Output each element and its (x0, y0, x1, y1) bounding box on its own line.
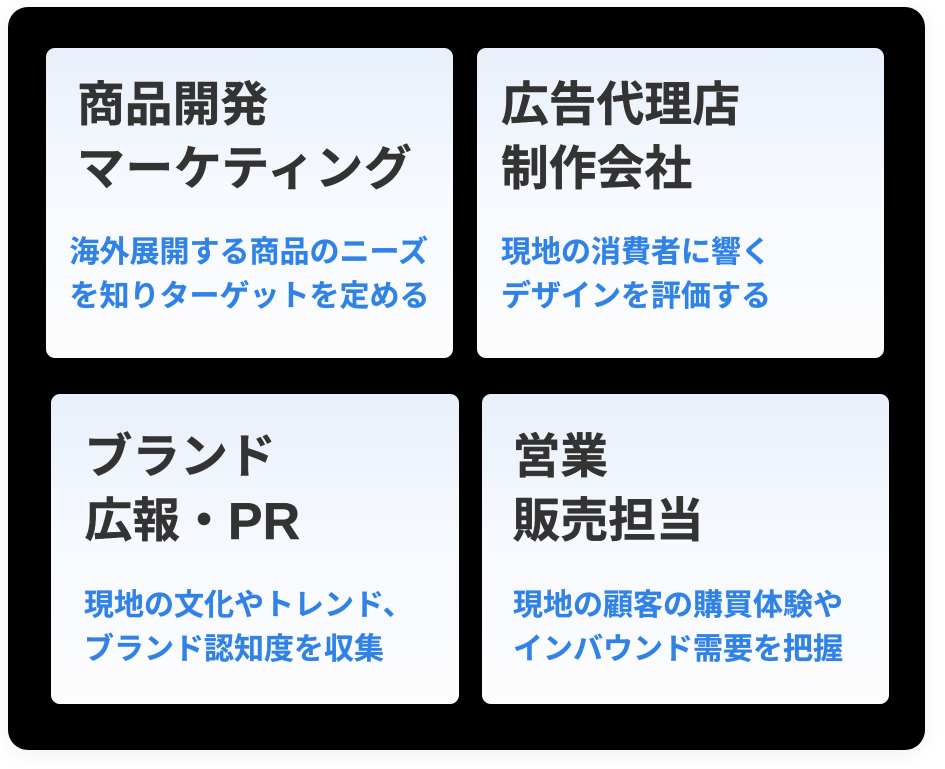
text: culture and trend collection: 現地の文化やトレンド、 (84, 589, 413, 622)
text: product needs and targeting: を知りターゲットを定める (70, 280, 430, 313)
text: product needs and targeting (70, 236, 430, 313)
heading: ad agency production company (501, 78, 740, 196)
heading: product development marketing (77, 78, 412, 196)
heading: ad agency production company: 広告代理店 (501, 78, 740, 132)
heading: brand PR (84, 431, 300, 551)
heading: sales staff: 販売担当 (512, 495, 704, 548)
heading: brand PR: 広報・ (84, 495, 228, 548)
text: customer experience and inbound demand: インバウンド需要を把握 (513, 633, 843, 666)
text: design evaluation: デザインを評価する (501, 280, 771, 313)
text: customer experience and inbound demand (513, 589, 843, 666)
heading: sales staff: 営業 (512, 431, 608, 484)
heading: sales staff (512, 431, 704, 548)
text: culture and trend collection (84, 589, 413, 666)
heading: brand PR: ブランド (84, 431, 276, 484)
heading: brand PR: PR (228, 493, 300, 551)
panel: brand and PR (51, 394, 459, 704)
text: culture and trend collection: ブランド認知度を収集 (84, 633, 384, 666)
panel: product development and marketing (46, 48, 453, 358)
heading: ad agency production company: 制作会社 (501, 142, 692, 196)
text: customer experience and inbound demand: 現地の顧客の購買体験や (513, 589, 843, 622)
heading: product development marketing: マーケティング (77, 142, 412, 196)
panel: sales (482, 394, 889, 704)
heading: product development marketing: 商品開発 (77, 78, 268, 132)
text: product needs and targeting: 海外展開する商品のニーズ (70, 236, 428, 269)
text: design evaluation (501, 236, 771, 313)
panel: ad agencies and production companies (477, 48, 884, 358)
text: design evaluation: 現地の消費者に響く (501, 236, 771, 269)
